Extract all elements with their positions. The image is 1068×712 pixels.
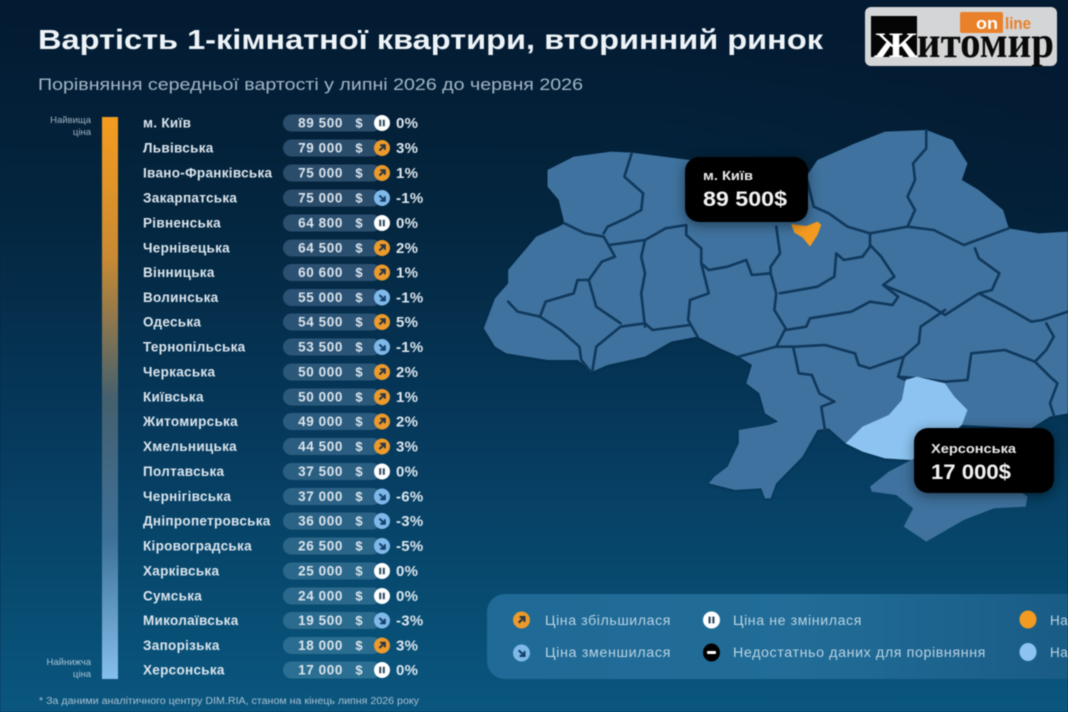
row: Тернопільська: 53 500	[298, 340, 343, 354]
row: Івано-Франківська: $	[355, 166, 363, 180]
row: Волинська	[143, 289, 424, 306]
row: Львівська: $	[355, 140, 363, 156]
row: Київська	[143, 388, 418, 406]
row: Івано-Франківська	[143, 164, 418, 182]
footnote: * За даними аналітичного центру DIM.RIA, станом на кінець липня 2026 року	[39, 696, 419, 707]
row: Черкаська: 2%	[396, 364, 418, 381]
row: Одеська: 5%	[396, 314, 418, 331]
row: Львівська	[143, 140, 418, 157]
row: Дніпропетровська	[143, 512, 424, 530]
row: Хмельницька: 44 500	[298, 439, 343, 454]
map of Ukraine	[484, 128, 1068, 542]
row: Хмельницька: 3%	[396, 438, 418, 456]
callout: м. Київ: м. Київ	[703, 168, 753, 183]
row: Дніпропетровська: -3%	[396, 513, 424, 530]
row: Закарпатська: -1%	[396, 190, 424, 207]
legend: price increased	[513, 612, 671, 628]
row: Рівненська	[143, 214, 418, 232]
row: Запорізька: $	[355, 638, 363, 653]
row: Тернопільська: -1%	[396, 339, 424, 356]
title: Вартість 1-кімнатної квартири, вторинний ринок	[38, 24, 824, 55]
row: Черкаська: 50 000	[298, 364, 343, 380]
legend: price unchanged: Ціна не змінилася	[733, 613, 862, 628]
row: м. Київ: 0%	[396, 115, 418, 132]
row: Сумська	[143, 588, 418, 605]
callout: Херсонська: Херсонська	[931, 441, 1017, 456]
row: Чернівецька	[143, 240, 418, 257]
row: Дніпропетровська: Дніпропетровська	[143, 514, 271, 528]
row: Полтавська: 37 500	[298, 464, 343, 479]
row: Харківська: 0%	[396, 563, 418, 580]
region: м. Київ	[791, 222, 821, 247]
row: Вінницька	[143, 264, 418, 282]
callout: м. Київ	[685, 157, 808, 222]
row: Черкаська: Черкаська	[143, 364, 215, 380]
row: Одеська: $	[355, 314, 363, 330]
legend: highest price: На	[1050, 613, 1068, 628]
row: м. Київ: 89 500	[298, 116, 343, 130]
row: Херсонська	[143, 662, 418, 679]
price scale: Найвища	[50, 115, 92, 126]
row: Івано-Франківська: 1%	[396, 165, 418, 182]
row: Харківська: 25 000	[298, 564, 343, 578]
row: Закарпатська: $	[355, 190, 363, 206]
legend: highest price	[1020, 610, 1068, 628]
row: Миколаївська: $	[355, 613, 363, 628]
row: Полтавська	[143, 463, 418, 480]
legend: lowest price	[1020, 643, 1068, 661]
row: Київська: $	[355, 390, 363, 404]
row: Рівненська: 0%	[396, 215, 418, 232]
callout: Херсонська	[914, 428, 1054, 493]
row: Дніпропетровська: $	[355, 514, 363, 528]
subtitle: Порівняння середньої вартості у липні 2026 до червня 2026	[38, 75, 583, 94]
row: Кіровоградська	[143, 538, 424, 555]
row: Закарпатська: 75 000	[298, 190, 343, 206]
row: Тернопільська: $	[355, 340, 363, 354]
row: Рівненська: 64 800	[298, 216, 343, 230]
legend: price unchanged	[703, 612, 862, 628]
row: Волинська: -1%	[396, 290, 424, 306]
row: Полтавська: Полтавська	[143, 464, 225, 479]
row: Сумська: Сумська	[143, 588, 202, 604]
logo: on	[976, 14, 998, 33]
row: Чернівецька: Чернівецька	[143, 240, 230, 256]
row: Херсонська: 17 000	[298, 662, 343, 678]
ranking table	[142, 114, 424, 679]
logo	[865, 7, 1057, 67]
row: Житомирська: 2%	[396, 414, 418, 430]
oblast borders	[508, 130, 1068, 430]
row: Одеська: 54 500	[298, 314, 343, 330]
row: Житомирська: $	[355, 414, 363, 429]
row: Харківська	[143, 562, 418, 580]
price scale: Найнижча	[46, 657, 92, 668]
row: Чернівецька: 64 500	[298, 240, 343, 256]
row: Чернігівська: -6%	[396, 488, 424, 506]
row: Запорізька: 18 000	[298, 638, 343, 653]
legend: price decreased: Ціна зменшилася	[545, 645, 671, 660]
price scale: ціна	[73, 127, 92, 138]
row: Чернівецька: $	[355, 240, 363, 256]
row: Запорізька: 3%	[396, 638, 418, 654]
row: Житомирська	[142, 413, 418, 430]
row: Харківська: Харківська	[143, 564, 219, 578]
row: Харківська: $	[355, 564, 363, 578]
logo: итомир	[917, 18, 1054, 67]
row: Львівська: 3%	[396, 140, 418, 157]
row: Миколаївська: -3%	[396, 612, 424, 630]
row: Івано-Франківська: 75 000	[298, 166, 343, 180]
row: Черкаська	[143, 364, 418, 381]
row: Волинська: 55 000	[298, 290, 343, 305]
row: Кіровоградська: 26 500	[298, 538, 343, 554]
row: Черкаська: $	[355, 364, 363, 380]
legend panel	[487, 594, 1068, 679]
row: Львівська: Львівська	[143, 140, 214, 156]
row: Вінницька: Вінницька	[143, 265, 215, 280]
row: Рівненська: $	[355, 216, 363, 230]
row: Херсонська: 0%	[396, 662, 418, 679]
row: Волинська: Волинська	[143, 290, 219, 305]
row: Чернігівська: $	[355, 489, 363, 504]
row: Запорізька	[143, 637, 418, 654]
row: Одеська	[143, 314, 418, 331]
row: Херсонська: Херсонська	[143, 662, 225, 678]
row: Херсонська: $	[355, 662, 363, 678]
callout: м. Київ: 89 500$	[703, 188, 787, 211]
legend: price decreased	[513, 644, 671, 662]
row: м. Київ: $	[355, 116, 363, 130]
row: Рівненська: Рівненська	[143, 216, 221, 230]
row: Чернігівська: Чернігівська	[143, 489, 231, 504]
row: Вінницька: 1%	[396, 264, 418, 282]
row: Львівська: 79 000	[298, 140, 343, 156]
row: Запорізька: Запорізька	[143, 638, 220, 653]
row: Закарпатська: Закарпатська	[143, 190, 237, 206]
row: Тернопільська: Тернопільська	[143, 340, 246, 354]
row: Миколаївська: 19 500	[298, 613, 343, 628]
price scale	[46, 115, 118, 680]
row: Волинська: $	[355, 290, 363, 305]
row: Хмельницька	[143, 438, 418, 456]
row: Полтавська: 0%	[396, 464, 418, 480]
row: Вінницька: $	[355, 265, 363, 280]
row: м. Київ	[143, 114, 418, 132]
row: Полтавська: $	[355, 464, 363, 479]
row: Вінницька: 60 600	[298, 265, 343, 280]
map silhouette	[484, 130, 1068, 498]
row: Сумська: 0%	[396, 588, 418, 605]
row: Івано-Франківська: Івано-Франківська	[143, 166, 273, 180]
row: Кіровоградська: Кіровоградська	[143, 538, 252, 554]
row: м. Київ: м. Київ	[143, 116, 191, 130]
legend: lowest price: На	[1050, 645, 1068, 660]
legend: insufficient data: Недостатньо даних для порівняння	[733, 645, 986, 660]
callout: Херсонська: 17 000$	[931, 461, 1011, 484]
row: Сумська: $	[355, 588, 363, 604]
price scale: ціна	[73, 669, 92, 680]
Crimea	[870, 453, 1028, 542]
row: Чернігівська: 37 000	[298, 489, 343, 504]
row: Київська: 50 000	[298, 390, 343, 404]
row: Кіровоградська: $	[355, 538, 363, 554]
row: Київська: Київська	[143, 390, 204, 404]
row: Чернівецька: 2%	[396, 240, 418, 257]
row: Київська: 1%	[396, 389, 418, 406]
row: Кіровоградська: -5%	[396, 538, 424, 555]
row: Хмельницька: $	[355, 439, 363, 454]
row: Хмельницька: Хмельницька	[143, 439, 237, 454]
logo: line	[1005, 14, 1031, 33]
region: Херсонська	[846, 377, 968, 460]
row: Дніпропетровська: 36 000	[298, 514, 343, 528]
logo: Ж	[874, 25, 918, 65]
row: Одеська: Одеська	[143, 314, 201, 330]
row: Миколаївська	[143, 612, 424, 630]
row: Чернігівська	[143, 488, 424, 506]
row: Сумська: 24 000	[298, 588, 343, 604]
row: Тернопільська	[143, 338, 424, 356]
row: Закарпатська	[143, 190, 424, 207]
legend: price increased: Ціна збільшилася	[545, 613, 671, 628]
row: Житомирська: 49 000	[298, 414, 343, 429]
row: Житомирська: Житомирська	[142, 414, 238, 429]
row: Миколаївська: Миколаївська	[143, 613, 239, 628]
